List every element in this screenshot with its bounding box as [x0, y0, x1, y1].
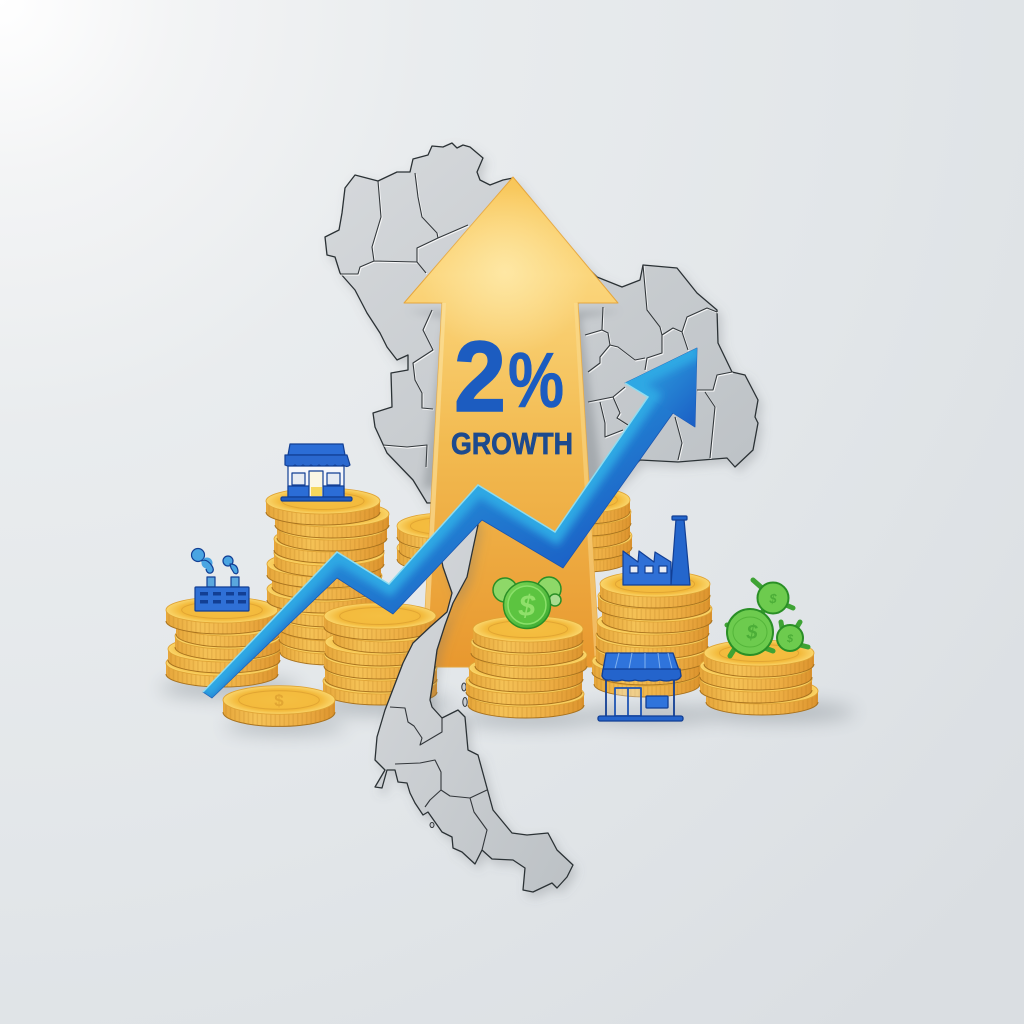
icon: store in front of stacks [598, 653, 683, 721]
coin stack behind arrow, right [540, 487, 632, 572]
large golden up arrow [404, 177, 621, 667]
arrow label: 2% [454, 321, 564, 433]
icon: green coin cluster, right: $ [745, 622, 758, 644]
icon: green coin cluster, right: $ [786, 633, 794, 645]
arrow label: 2%: 2 [454, 321, 506, 433]
arrow label: GROWTH: GROWTH [451, 426, 573, 461]
map: northern region [325, 143, 758, 503]
loose coin: $ [274, 691, 284, 710]
coin stack: tall [266, 488, 389, 665]
coin stack: front centre-left [323, 603, 439, 705]
coin stack: green coin base [466, 616, 587, 718]
icon: factory with smoke, left [192, 548, 249, 611]
loose coin [223, 686, 335, 726]
map: southern peninsula [375, 510, 573, 892]
small islands [430, 683, 467, 828]
icon: green coin cluster, right [727, 580, 808, 656]
blue rising trend arrow [203, 348, 697, 698]
icon: green dollar coins on stack [493, 577, 561, 628]
coin stack behind arrow, left [397, 513, 495, 572]
coin stack: far left [166, 597, 281, 687]
icon: factory with chimney, right [623, 516, 690, 585]
arrow label: 2%: % [508, 336, 564, 424]
coin stack: factory base [592, 571, 712, 697]
icon: store on tall stack [281, 444, 352, 501]
ground shadows [160, 678, 855, 734]
icon: green coin cluster, right: $ [768, 591, 777, 606]
coin stack: far right [700, 640, 818, 715]
peninsula province borders [390, 707, 487, 850]
icon: green dollar coins on stack: $ [518, 590, 536, 623]
